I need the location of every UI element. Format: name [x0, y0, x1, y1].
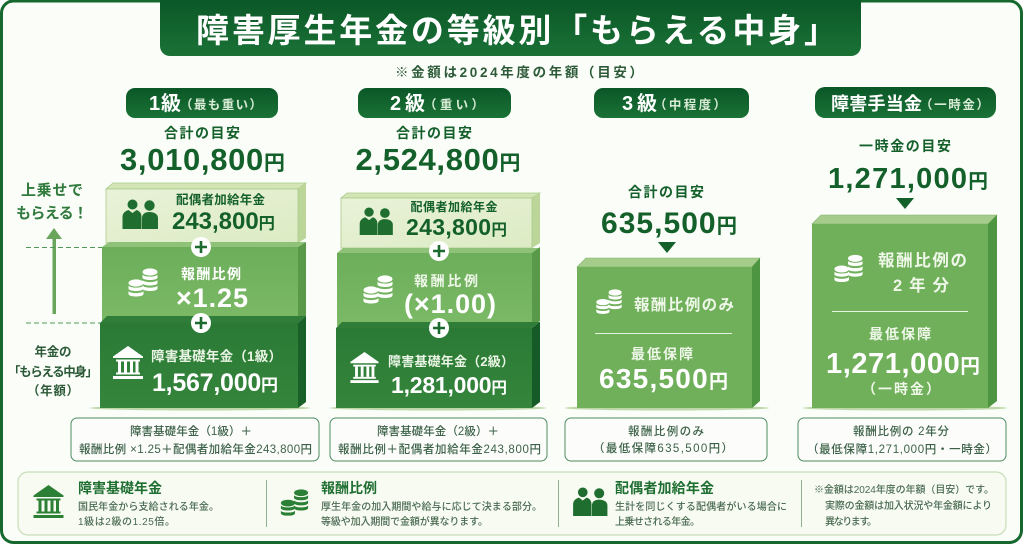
allowance formula box: 報酬比例の 2年分: [853, 424, 950, 438]
grade 2 remuneration block: 報酬比例: [414, 273, 478, 289]
left note: pension contents: 年金の: [34, 344, 72, 359]
legend: remuneration: [281, 480, 542, 528]
grade 2 pill: （重い）: [424, 97, 484, 112]
legend: remuneration: 厚生年金の加入期間や給与に応じて決まる部分。: [321, 500, 542, 513]
grade 2 total: 合計の目安: [396, 125, 472, 141]
grade 3 total: 合計の目安: [628, 184, 704, 200]
grade 2 formula box: [330, 418, 547, 461]
grade 1 total: 3,010,800円: [120, 142, 285, 177]
allowance formula box: [798, 418, 1006, 461]
allowance total: [828, 138, 988, 209]
icon: people: [360, 207, 393, 235]
legend: basic pension: 1級は2級の1.25倍。: [78, 515, 175, 528]
grade 1 pill: （最も重い）: [180, 97, 262, 112]
icon: coins: [834, 255, 863, 282]
grade 2 basic block: 1,281,000円: [391, 372, 507, 398]
grade 2 formula box: 障害基礎年金（2級）＋: [377, 424, 499, 438]
icon: bank: [350, 352, 379, 383]
grade 1 formula box: [71, 418, 319, 461]
subtitle note: ※金額は2024年度の年額（目安）: [395, 64, 643, 80]
grade 1 spouse block: [90, 183, 310, 410]
grade 2 total: [356, 125, 520, 177]
grade 3 total: [601, 184, 737, 253]
column: disability allowance: [798, 87, 1007, 461]
icon: coins: [128, 268, 158, 296]
grade 1 spouse block: 243,800円: [172, 208, 275, 235]
legend: amount note: 異なります。: [825, 516, 877, 528]
allowance block: （一時金）: [862, 381, 940, 397]
left note: pension contents: 「もらえる中身」: [8, 364, 98, 379]
left note: added amount with arrow: [16, 182, 102, 323]
grade 3 pill: [594, 88, 749, 118]
column: grade 1: [71, 88, 319, 461]
grade 2 pill: 2級: [390, 92, 425, 115]
grade 1 total: [120, 125, 285, 177]
grade 3 pill: 3級: [622, 92, 657, 115]
allowance pill: [815, 87, 996, 118]
legend: remuneration: 報酬比例: [321, 480, 377, 496]
grade 2 pill: [358, 88, 511, 118]
allowance block: 1,271,000円: [826, 348, 980, 380]
grade 1 basic block: 1,567,000円: [152, 369, 278, 397]
legend: spouse: 上乗せされる年金。: [615, 515, 700, 528]
allowance block: 報酬比例の: [878, 251, 967, 270]
icon: bank: [113, 346, 143, 379]
grade 2 spouse block: [330, 193, 546, 410]
grade 1 basic block: 障害基礎年金（1級）: [151, 348, 282, 364]
grade 1 formula box: 障害基礎年金（1級）＋: [130, 424, 252, 438]
plus signs: [191, 237, 211, 333]
grade 1 pill: [126, 88, 278, 118]
legend: spouse: 生計を同じくする配偶者がいる場合に: [615, 500, 787, 513]
legend: basic pension: [34, 480, 219, 528]
grade 2 basic block: 障害基礎年金（2級）: [388, 354, 514, 369]
legend: spouse: [573, 480, 787, 528]
allowance formula box: （最低保障1,271,000円・一時金）: [807, 442, 997, 456]
grade 2 basic block: [336, 322, 540, 408]
grade 1 basic block: [100, 316, 306, 408]
grade 1 remuneration block: [102, 242, 306, 321]
legend panel: [18, 472, 1006, 535]
grade 3 pill: （中程度）: [654, 97, 726, 112]
grade 1 formula box: 報酬比例 ×1.25＋配偶者加給年金243,800円: [79, 442, 312, 456]
grade 1 remuneration block: ×1.25: [176, 283, 248, 313]
grade 3 formula box: 報酬比例のみ: [628, 424, 704, 438]
grade 1 spouse block: 配偶者加給年金: [176, 192, 265, 207]
legend: remuneration: 等級や加入期間で金額が異なります。: [321, 515, 488, 528]
left note: added amount with arrow: もらえる！: [16, 205, 88, 222]
grade 3 block: 最低保障: [631, 346, 693, 362]
grade 2 remuneration block: (×1.00): [404, 289, 496, 319]
legend: spouse: 配偶者加給年金: [615, 480, 714, 496]
column: grade 3: [565, 88, 769, 461]
grade 3 block: [565, 258, 769, 410]
grade 3 block: 635,500円: [599, 363, 728, 394]
icon: people: [122, 200, 158, 229]
grade 2 spouse block: 配偶者加給年金: [410, 199, 498, 214]
icon: coins: [364, 275, 392, 303]
legend: basic pension: 障害基礎年金: [78, 480, 162, 496]
grade 2 spouse block: 243,800円: [406, 214, 507, 240]
left note: pension contents: （年額）: [27, 383, 79, 398]
allowance pill: 障害手当金: [831, 94, 922, 114]
grade 2 formula box: 報酬比例＋配偶者加給年金243,800円: [338, 442, 541, 456]
grade 2 remuneration block: [337, 247, 540, 326]
title banner: [160, 0, 861, 56]
grade 3 formula box: （最低保障635,500円）: [593, 441, 733, 455]
plus signs: [429, 241, 449, 338]
allowance block: 最低保障: [869, 326, 931, 342]
allowance total: 1,271,000円: [828, 163, 988, 195]
left note: pension contents: [8, 344, 98, 398]
grade 1 pill: 1級: [149, 92, 181, 115]
grade 1 remuneration block: 報酬比例: [181, 266, 241, 282]
legend: amount note: ※金額は2024年度の年額（目安）です。: [814, 483, 994, 496]
title banner: 障害厚生年金の等級別「もらえる中身」: [196, 12, 837, 49]
allowance block: [803, 215, 1007, 410]
allowance total: 一時金の目安: [859, 138, 951, 154]
legend: amount note: [814, 483, 994, 528]
grade 3 block: 報酬比例のみ: [634, 296, 734, 314]
column: grade 2: [330, 88, 547, 461]
left note: added amount with arrow: 上乗せで: [21, 182, 83, 199]
grade 2 total: 2,524,800円: [356, 142, 520, 177]
allowance pill: （一時金）: [920, 97, 989, 112]
legend: amount note: 実際の金額は加入状況や年金額により: [825, 499, 992, 512]
legend: basic pension: 国民年金から支給される年金。: [78, 500, 219, 513]
icon: coins: [596, 289, 622, 314]
allowance block: 2年分: [893, 275, 950, 295]
grade 3 formula box: [565, 418, 767, 461]
grade 1 total: 合計の目安: [164, 125, 240, 141]
grade 3 total: 635,500円: [601, 207, 737, 240]
